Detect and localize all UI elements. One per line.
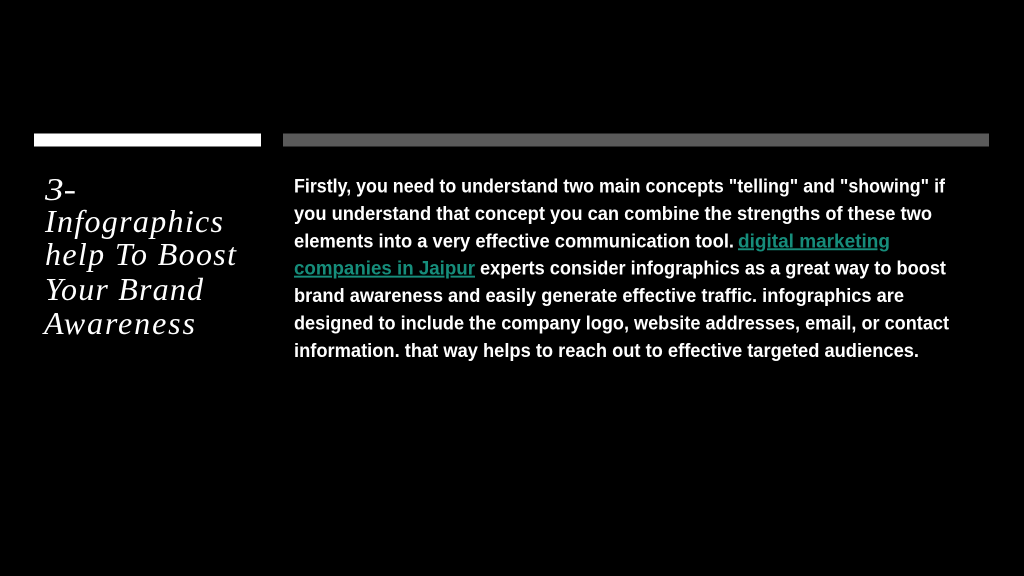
link: digital marketing: digital marketing	[738, 230, 890, 252]
body paragraph: designed to include the company logo, website addresses, email, or contact	[294, 312, 950, 334]
heading	[42, 171, 237, 341]
heading: help To Boost	[45, 236, 237, 272]
body paragraph	[294, 176, 950, 362]
heading: 3-	[44, 171, 76, 207]
white accent bar	[34, 134, 261, 146]
body paragraph: information. that way helps to reach out to effective targeted audiences.	[294, 340, 919, 362]
heading: Awareness	[42, 305, 195, 341]
body paragraph: Firstly, you need to understand two main concepts "telling" and "showing" if	[294, 176, 945, 198]
grey header bar	[283, 134, 989, 146]
body paragraph: experts consider infographics as a great way to boost	[480, 258, 946, 280]
body paragraph: elements into a very effective communication tool.	[294, 230, 734, 252]
heading: Your Brand	[45, 271, 204, 307]
body paragraph: you understand that concept you can combine the strengths of these two	[294, 203, 932, 225]
heading: Infographics	[44, 203, 223, 239]
link: companies in Jaipur: companies in Jaipur	[294, 258, 475, 280]
body paragraph: brand awareness and easily generate effective traffic. infographics are	[294, 285, 904, 307]
